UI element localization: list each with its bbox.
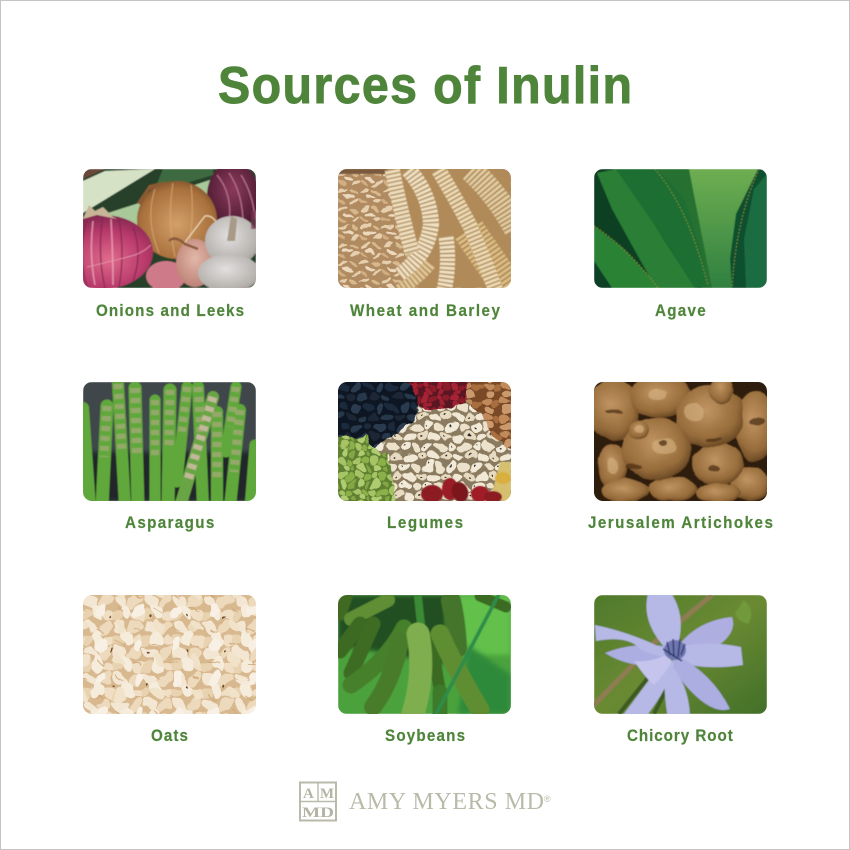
title: Sources of Inulin — [218, 56, 632, 114]
photo: wheat ears over barley grain — [338, 169, 511, 288]
label: Legumes — [387, 514, 463, 532]
logo wordmark: AMY MYERS MD — [349, 789, 544, 815]
photo: agave leaves — [594, 169, 767, 288]
photo: onions, garlic and leeks — [83, 169, 256, 288]
label: Jerusalem Artichokes — [588, 514, 773, 532]
label: Wheat and Barley — [350, 302, 500, 320]
label: Oats — [151, 727, 188, 745]
card: asparagus — [83, 382, 256, 532]
logo: Amy Myers MD — [300, 782, 551, 821]
logo mark — [300, 782, 336, 821]
photo: rolled oats — [83, 595, 256, 714]
photo: chicory flower — [592, 593, 767, 719]
card: jerusalem artichokes — [588, 374, 775, 532]
photo: soybean pods — [338, 594, 511, 720]
card: onions and leeks — [83, 169, 256, 316]
logo mark: A — [303, 786, 314, 802]
label: Asparagus — [125, 514, 214, 532]
registered mark: ® — [544, 794, 551, 804]
card: chicory root — [592, 593, 767, 745]
photo: mixed beans and peas — [338, 382, 511, 501]
label: Onions and Leeks — [96, 302, 244, 320]
card: wheat and barley — [338, 169, 511, 320]
photo: asparagus spears — [83, 382, 256, 507]
card: soybeans — [338, 594, 511, 745]
card: oats — [83, 595, 256, 742]
card: agave — [594, 169, 767, 320]
label: Soybeans — [385, 727, 465, 745]
logo mark: M — [320, 786, 334, 802]
logo mark: MD — [302, 805, 334, 821]
label: Chicory Root — [627, 727, 733, 745]
label: Agave — [655, 302, 706, 320]
card: legumes — [338, 382, 511, 532]
photo: jerusalem artichoke tubers — [594, 382, 767, 501]
